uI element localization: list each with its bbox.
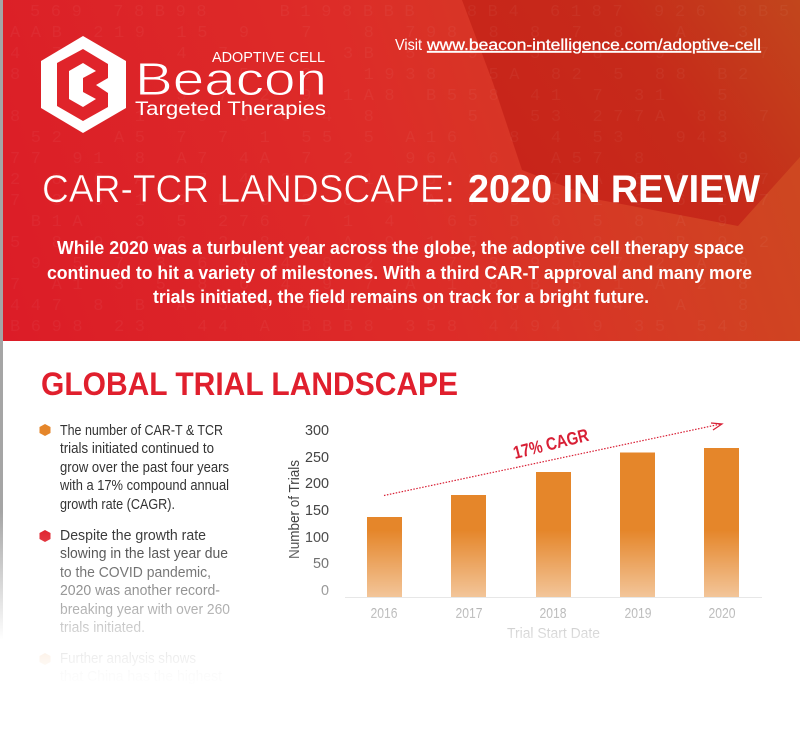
- logo text: targeted therapies: Targeted Therapies: [135, 99, 326, 120]
- bullet: covid: breaking year with over 260: [60, 602, 230, 618]
- dark angular shape: [462, 0, 800, 226]
- bullet: china: Further analysis shows: [60, 651, 196, 667]
- bullet: covid: slowing in the last year due: [60, 546, 228, 562]
- background digit pattern: 4 7 4 7 3B 5 9 5 8 9 7: [10, 45, 780, 64]
- bullet: growth: with a 17% compound annual: [59, 478, 229, 494]
- panel: header banner: [0, 0, 800, 341]
- x axis labels: 2019: [624, 605, 652, 622]
- background digit pattern: B698 23 44 A BBB8 358 4494 9 35 549: [10, 318, 759, 337]
- section heading: GLOBAL TRIAL LANDSCAPE: [41, 366, 458, 402]
- website link: www.beacon-intelligence.com/adoptive-cell: [426, 37, 761, 54]
- title: 2020 IN REVIEW: [468, 168, 760, 211]
- x axis labels: 2020: [708, 605, 736, 622]
- bullet: covid: trials initiated.: [60, 620, 145, 636]
- background digit pattern: 7 3 5 1 9 B 6 2 8 4 A 7 3 5 1 9 6 2 7: [10, 192, 780, 211]
- x axis labels: 2017: [456, 605, 482, 622]
- background digit pattern: AAB 219 15 9 7 8 798 8 8 7 8 A 3: [10, 24, 759, 43]
- background digit pattern: 77 91 8 A7 4A 7 2 96A 6 A57 8 9: [10, 150, 759, 169]
- header background: [0, 0, 800, 341]
- y axis labels: 50: [313, 555, 329, 572]
- icon: hexagon B mark: [41, 36, 126, 133]
- background digit pattern: 5 8 9 3 6 2 8 4 A 9 1 5 2 A 8 9 B 9 2: [10, 234, 780, 253]
- bars: [367, 448, 739, 598]
- logo text: beacon: Beacon: [135, 53, 327, 105]
- bullet: china: [40, 651, 222, 685]
- intro paragraph: trials initiated, the field remains on track for a bright future.: [153, 287, 649, 307]
- background digit pattern: [10, 3, 800, 337]
- y axis labels: 250: [305, 449, 329, 466]
- x axis line: [345, 597, 762, 598]
- x axis labels: 2016: [370, 605, 398, 622]
- intro paragraph: While 2020 was a turbulent year across the globe, the adoptive cell therapy space: [57, 238, 744, 258]
- bullet: covid: 2020 was another record-: [60, 583, 220, 599]
- background digit pattern: 8 7 1 9 3 6 4 8 5 53 277A 88 7: [10, 108, 780, 127]
- background digit pattern: 52 A5 7 7 1 55 5 A16 8 4 53 943: [10, 129, 738, 148]
- bullet: covid: Despite the growth rate: [60, 528, 206, 544]
- bullet: covid: [40, 528, 230, 636]
- x axis title: Trial Start Date: [507, 625, 600, 642]
- background digit pattern: A 4 5 7 2 9 1A8 B558 41 7 31 5: [10, 87, 738, 106]
- background digit pattern: 447 8 B A 5 8 4 1 3 5 7 8 2 4 A 8: [10, 297, 759, 316]
- background digit pattern: 2 8 6 A 7 4 3 9 1 5 8 4 7 A 5 9 4 7: [10, 171, 780, 190]
- x axis labels: [370, 605, 736, 622]
- bullet: growth: growth rate (CAGR).: [60, 497, 175, 513]
- background digit pattern: B1A 3 5 276 7 1 4 65 B 6 5 8 A 9: [10, 213, 738, 232]
- bullet: growth: The number of CAR-T & TCR: [60, 423, 223, 439]
- y axis title: Number of Trials: [286, 460, 303, 559]
- logo text: adoptive cell: ADOPTIVE CELL: [212, 49, 325, 66]
- y axis labels: 300: [305, 422, 329, 439]
- background digit pattern: 7 A1 3 5 8 6 4 9 7 A 1 8 B 5 1 A 2 8: [10, 276, 759, 295]
- website link: Visit: [395, 37, 423, 54]
- background digit pattern: 569 78B98 B198BBB 8B4 6187 926 8B5: [30, 3, 800, 22]
- intro paragraph: [47, 238, 752, 307]
- intro paragraph: continued to hit a variety of milestones. With a third CAR-T approval and many more: [47, 263, 752, 283]
- background digit pattern: 9 5 7 3 6 A 4 8 2 5 7 3 9 6 7 2 A 9: [10, 255, 759, 274]
- bullet: china: that China has the highest: [60, 669, 222, 685]
- bullet: covid: to the COVID pandemic,: [60, 565, 211, 581]
- logo: [41, 36, 327, 133]
- title: CAR-TCR LANDSCAPE:: [42, 168, 455, 211]
- trend arrow: [384, 423, 722, 496]
- y axis labels: 150: [305, 502, 329, 519]
- bar chart: [286, 422, 762, 642]
- title: [42, 168, 760, 211]
- y axis labels: 200: [305, 475, 329, 492]
- bullet: growth: trials initiated continued to: [60, 441, 214, 457]
- x axis labels: 2018: [540, 605, 566, 622]
- bullet list: [40, 423, 230, 685]
- background digit pattern: 8 9 5 8 1938 5A 82 5 88 B2: [10, 66, 759, 85]
- bullet: growth: [40, 423, 229, 513]
- CAGR label: 17% CAGR: [511, 425, 591, 463]
- y axis labels: 100: [305, 529, 329, 546]
- y axis labels: [305, 422, 329, 599]
- y axis labels: 0: [321, 582, 329, 599]
- bullet: growth: grow over the past four years: [60, 460, 229, 476]
